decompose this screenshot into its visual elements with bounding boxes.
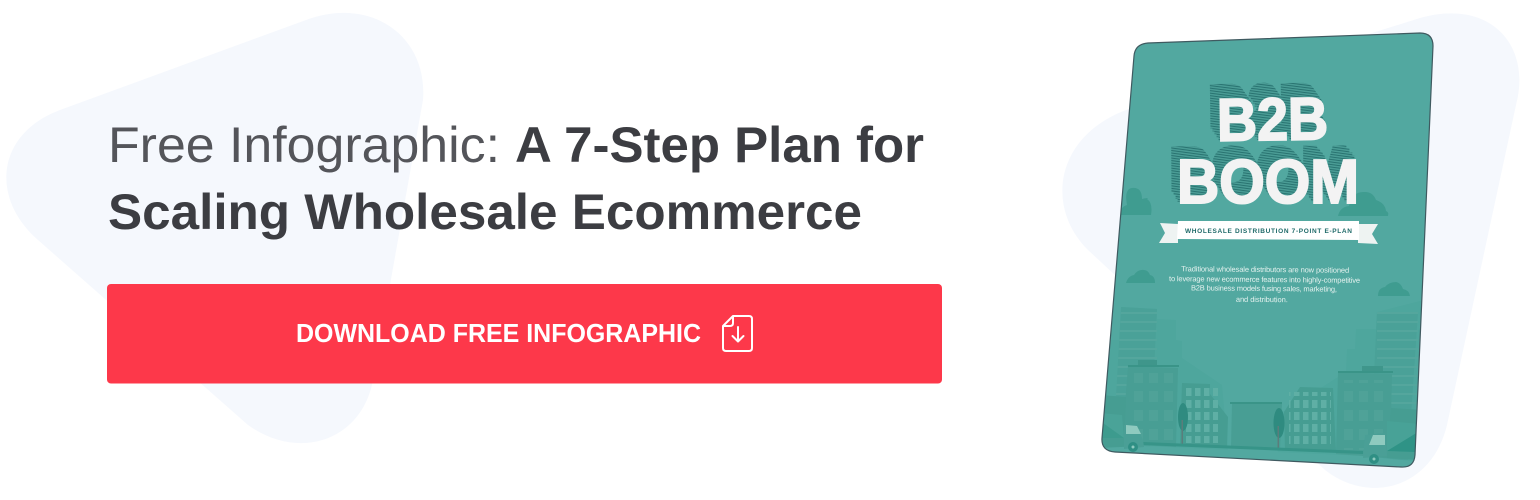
- cover title: BOOM depth: BOOM: [1173, 142, 1355, 212]
- cover ribbon: WHOLESALE DISTRIBUTION 7-POINT E-PLAN: [1185, 228, 1352, 235]
- cover paragraph: [1169, 264, 1360, 305]
- heading: Free Infographic:: [108, 117, 500, 173]
- cover title: BOOM: BOOM: [1177, 148, 1359, 217]
- cover paragraph: to leverage new ecommerce features into highly-competitive: [1169, 274, 1360, 285]
- cover title: BOOM depth: BOOM: [1175, 145, 1357, 214]
- cover paragraph: Traditional wholesale distributors are now positioned: [1181, 264, 1349, 275]
- cover title: B2B depth: B2B: [1211, 77, 1323, 146]
- cover paragraph: B2B business models fusing sales, marketing,: [1191, 283, 1337, 294]
- background blob: right: [1062, 13, 1519, 488]
- heading: A 7-Step Plan for: [515, 117, 924, 173]
- cover title: B2B depth: B2B: [1213, 80, 1325, 149]
- cover outline: [1102, 33, 1433, 467]
- icon: file download: [723, 316, 752, 351]
- heading: [108, 117, 924, 240]
- cover paragraph: and distribution.: [1236, 295, 1288, 304]
- cover ribbon: [1159, 221, 1378, 244]
- cover illustration: skyline: [1102, 308, 1418, 460]
- cover title: B2B depth: B2B: [1209, 74, 1321, 143]
- cover title: B2B depth: B2B: [1216, 83, 1327, 152]
- cover title: B2B: B2B: [1217, 85, 1328, 154]
- cover title: BOOM depth: BOOM: [1171, 138, 1352, 208]
- cover illustration: road: [1143, 442, 1363, 454]
- cover illustration: trees: [1178, 403, 1284, 448]
- cover title: BOOM depth: BOOM: [1169, 135, 1349, 205]
- heading: Scaling Wholesale Ecommerce: [108, 184, 862, 240]
- cover title: B2B depth: B2B: [1207, 71, 1319, 140]
- cover illustration: delivery trucks: [1103, 424, 1416, 464]
- e-book cover: [1100, 33, 1433, 475]
- button label: DOWNLOAD FREE INFOGRAPHIC: [296, 318, 701, 348]
- cover illustration: clouds: [1120, 188, 1410, 296]
- background blob: left: [6, 13, 423, 443]
- download button: [107, 284, 942, 384]
